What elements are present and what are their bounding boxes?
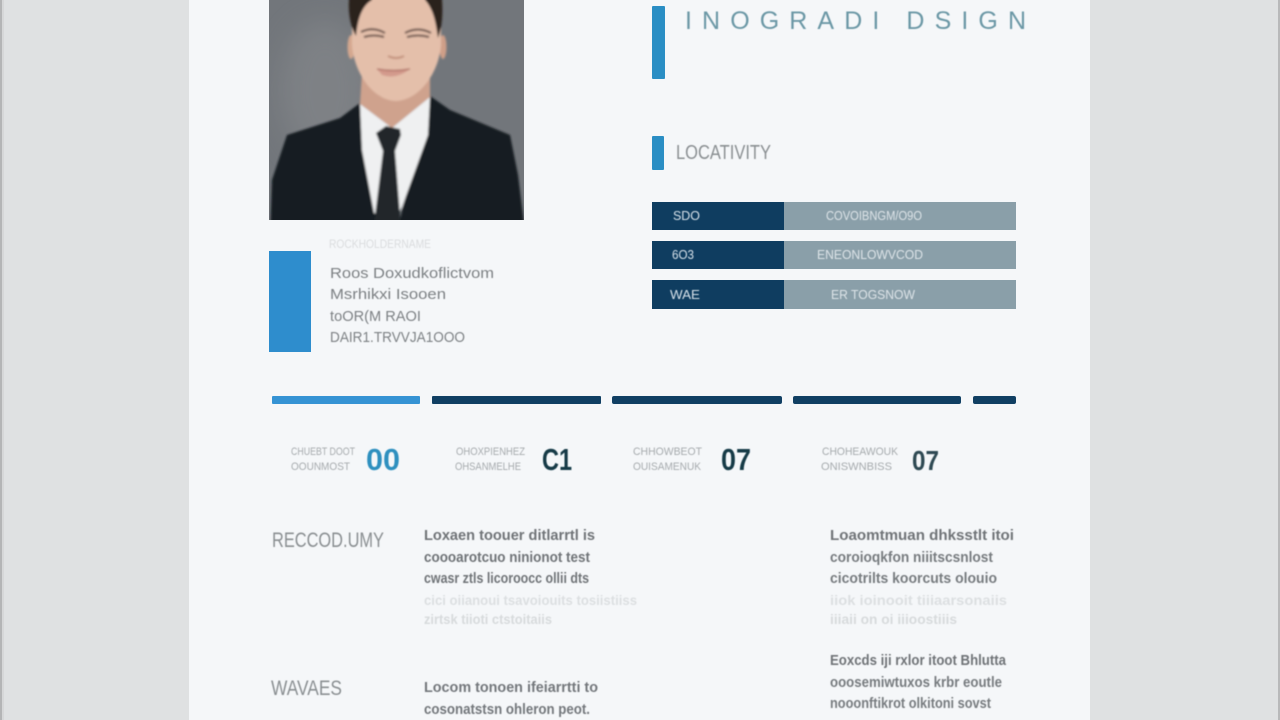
contact details: toOR(M RAOI: [330, 308, 421, 325]
body text: first column bottom: Locom tonoen ifeiarrtti to: [424, 680, 598, 696]
body text: first column top: Loxaen toouer ditlarrtl is: [424, 528, 595, 544]
stat 00: OOUNMOST: [291, 461, 350, 473]
stat 00: 00: [366, 442, 400, 477]
hair: [349, 0, 372, 36]
section heading: LOCATIVITY: [676, 142, 771, 164]
eyebrows: [361, 29, 385, 33]
tie: [374, 124, 402, 220]
body text: second column bottom: nooonftikrot olkitoni sovst: [830, 696, 991, 712]
row 2: [652, 241, 1016, 269]
row 1: [652, 202, 1016, 230]
body text: first column top: cici oiianoui tsavoiouits tosiistiiss: [424, 592, 637, 608]
stat C1: C1: [542, 442, 572, 477]
body text: first column top: [424, 528, 637, 627]
stat 07: OUISAMENUK: [633, 461, 702, 473]
stat 07 second: 07: [912, 445, 939, 476]
body text: second column top: cicotrilts koorcuts olouio: [830, 571, 997, 587]
body text: second column bottom: [830, 653, 1007, 712]
body text: first column top: zirtsk tiioti ctstoitaiis: [424, 611, 552, 627]
body text: second column top: iiiaii on oi iiioostiiis: [830, 611, 957, 627]
contact details: Roos Doxudkoflictvom: [330, 265, 494, 282]
contact details: DAIR1.TRVVJA1OOO: [330, 329, 465, 346]
mouth: [378, 70, 408, 77]
row 3: WAE: [670, 287, 700, 302]
eyes: [364, 36, 384, 37]
row 1: COVOIBNGM/O9O: [826, 208, 922, 223]
row 3: [652, 280, 1016, 309]
section accent bar: [652, 136, 664, 170]
body text: second column bottom: ooosemiwtuxos krbr eoutle: [830, 675, 1002, 691]
body text: second column top: [830, 528, 1014, 627]
stat 00: [291, 442, 400, 477]
stat C1: OHOXPIENHEZ: [456, 446, 525, 458]
title: INOGRADI DSIGN: [685, 7, 1026, 35]
timeline segments: [272, 396, 1016, 404]
body text: first column bottom: cosonatstsn ohleron peot.: [424, 702, 590, 718]
shirt: [360, 97, 430, 222]
body text: second column top: coroioqkfon niiitscsnlost: [830, 550, 993, 566]
stat C1: OHSANMELHE: [455, 461, 521, 473]
heading: wages: WAVAES: [271, 677, 342, 700]
row 3: ER TOGSNOW: [831, 287, 916, 302]
stat 07: 07: [721, 442, 751, 477]
row 2: ENEONLOWVCOD: [817, 247, 923, 262]
contact details: [329, 237, 494, 346]
contact details: ROCKHOLDERNAME: [329, 237, 431, 251]
data table: [652, 202, 1016, 309]
body text: second column top: Loaomtmuan dhksstlt itoi: [830, 528, 1014, 544]
body text: second column bottom: Eoxcds iji rxlor itoot Bhlutta: [830, 653, 1007, 669]
portrait photo: [269, 0, 526, 240]
stat 07 second: [821, 445, 939, 476]
row 1: SDO: [673, 208, 700, 223]
neck: [360, 72, 430, 128]
contact details: Msrhikxi Isooen: [330, 286, 446, 303]
stat 07: CHHOWBEOT: [633, 446, 702, 458]
suit: [269, 96, 524, 220]
stat 07 second: CHOHEAWOUK: [822, 446, 899, 458]
stat 00: CHUEBT DOOT: [291, 446, 355, 458]
ears: [348, 35, 354, 59]
body text: first column top: coooarotcuo ninionot test: [424, 550, 590, 566]
body text: second column top: iiok ioinooit tiiiaarsonaiis: [830, 592, 1007, 608]
contact accent block: [269, 251, 311, 352]
nose: [388, 56, 404, 58]
face: [352, 0, 441, 101]
title accent bar: [652, 6, 665, 79]
stat 07: [633, 442, 751, 477]
stat C1: [455, 442, 572, 477]
body text: first column top: cwasr ztls licoroocc ollii dts: [424, 571, 589, 587]
left backdrop: [0, 0, 189, 720]
row 2: 6O3: [672, 247, 694, 262]
body text: first column bottom: [424, 680, 598, 718]
resume page: [189, 0, 1090, 720]
right backdrop: [1090, 0, 1280, 720]
stat 07 second: ONISWNBISS: [821, 461, 892, 473]
heading: resume: RECCOD.UMY: [272, 529, 384, 552]
